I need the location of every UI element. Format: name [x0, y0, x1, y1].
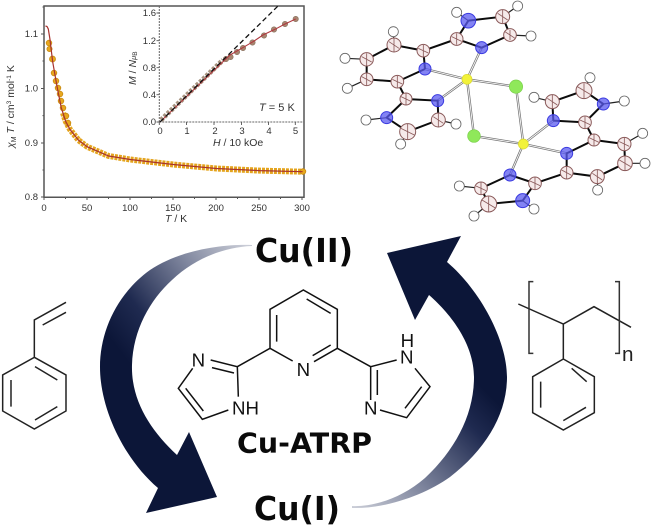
inset y tick labels: 0.4: [143, 90, 156, 101]
y axis title: χ: [5, 142, 17, 149]
inset y tick labels: [143, 8, 156, 128]
ligand structure: bis-imidazolyl pyridine: [178, 290, 430, 419]
ligand atom labels: N: [297, 359, 310, 380]
inset chart: magnetization vs field: [127, 6, 304, 149]
ligand atom labels: N: [400, 346, 413, 367]
x axis title: T / K: [165, 213, 187, 225]
left curved arrow: Cu(II) to Cu(I): [100, 245, 252, 513]
hydrogen bonds: [345, 6, 645, 216]
x axis tick labels: 50: [82, 203, 92, 214]
y axis title: 3: [6, 100, 13, 104]
label: Cu-ATRP: Cu-ATRP: [237, 426, 372, 460]
inset y tick labels: 0.8: [143, 63, 156, 74]
inset x tick labels: 5: [293, 126, 298, 137]
susceptibility data points: [46, 40, 306, 174]
ligand atom labels: NH: [232, 397, 259, 418]
inset chart: magnetization vs field: M / Nμ: [127, 56, 139, 85]
copper atoms: [462, 74, 528, 149]
x axis tick labels: 100: [122, 203, 138, 214]
chlorine atoms: [468, 80, 523, 142]
x axis tick labels: 200: [208, 203, 224, 214]
y axis tick labels: 0.8: [25, 192, 38, 203]
ligand atom labels: H: [401, 330, 414, 351]
ligand atom labels: [192, 330, 414, 418]
main plot frame: [44, 6, 304, 197]
y axis title: -1: [6, 75, 13, 81]
inset dashed linear trend: [160, 6, 278, 122]
inset y tick labels: 1.6: [143, 8, 156, 19]
inset y tick labels: 0.0: [143, 117, 156, 128]
ligand atom labels: N: [192, 350, 205, 371]
inset y tick labels: 1.2: [143, 36, 156, 47]
label: Cu(II): Cu(II): [255, 231, 353, 270]
magnetization data points: [161, 16, 298, 120]
inset chart: magnetization vs field: B: [132, 51, 139, 56]
y axis tick labels: 1.0: [25, 84, 38, 94]
y axis title: K: [5, 65, 17, 75]
y axis title: T: [5, 126, 17, 136]
metal coordination bonds: [425, 48, 567, 175]
temperature label: T = 5 K: [259, 102, 295, 114]
hydrogen atoms: [340, 1, 650, 221]
y axis title: / cm: [5, 104, 17, 124]
inset x tick labels: 0: [157, 126, 163, 137]
inset x tick labels: [157, 126, 298, 137]
inset x tick labels: 1: [184, 126, 190, 137]
ligand atom labels: N: [364, 397, 377, 418]
carbon ellipsoid cross marks: [362, 10, 631, 212]
x axis tick labels: 150: [165, 203, 181, 214]
x axis tick labels: 250: [251, 203, 267, 214]
chart: magnetic susceptibility vs temperature: [5, 6, 310, 225]
y axis tick labels: 1.1: [25, 29, 38, 40]
x axis tick labels: [41, 203, 310, 214]
inset x tick labels: 2: [212, 126, 218, 137]
inset x tick labels: 3: [239, 126, 245, 137]
right curved arrow: Cu(I) to Cu(II): [352, 236, 507, 508]
x axis tick labels: 0: [41, 203, 47, 214]
polystyrene structure: [518, 282, 633, 430]
inset fitted curve: [160, 19, 296, 122]
x axis tick labels: 300: [294, 203, 310, 214]
fitted curve: [46, 26, 303, 172]
crystal structure molecule: [340, 1, 650, 221]
repeat subscript n: n: [622, 343, 633, 366]
label: Cu(I): Cu(I): [254, 489, 340, 528]
inset axis titles: H / 10 kOe: [213, 137, 263, 149]
styrene monomer structure: [3, 302, 66, 429]
y axis title: mol: [5, 81, 17, 101]
covalent bonds: [367, 17, 625, 204]
carbon atoms: [360, 10, 632, 212]
y axis tick labels: [25, 29, 38, 203]
inset x tick labels: 4: [266, 126, 272, 137]
y axis title: M: [11, 136, 18, 142]
polymer brackets: [529, 282, 619, 353]
nitrogen atoms: [381, 13, 609, 208]
y axis tick labels: 0.9: [25, 138, 38, 149]
